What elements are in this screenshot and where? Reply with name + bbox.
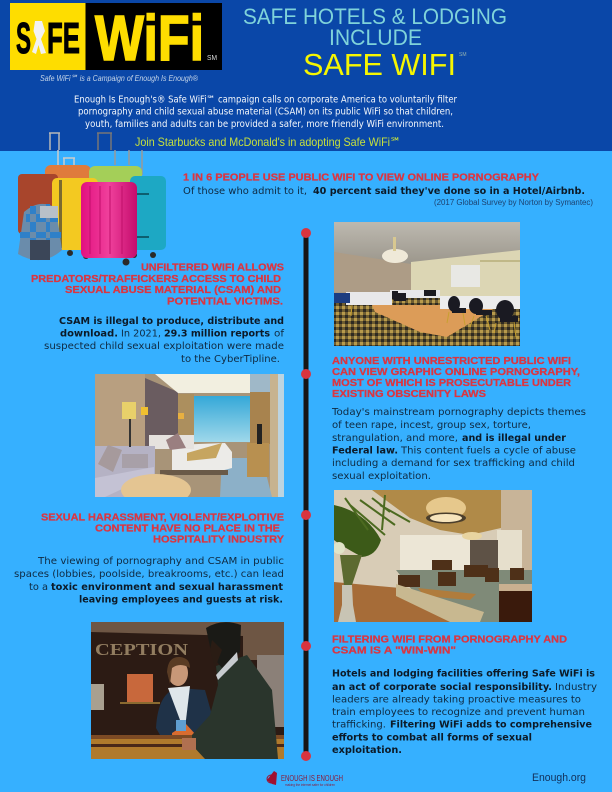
- heading: win-win: [332, 635, 568, 656]
- text: mainstream pornography: Today's mainstream pornography depicts themes: [331, 407, 586, 418]
- text: corporate social responsibility: train employees to recognize and prevent human: [332, 707, 585, 718]
- text: corporate social responsibility: Filtering WiFi adds to comprehensive: [390, 720, 592, 731]
- heading: unrestricted public wifi: [332, 356, 580, 400]
- heading: unfiltered wifi: POTENTIAL VICTIMS.: [167, 297, 283, 308]
- survey statement: 40 percent said they've done so in a Hotel/Airbnb.: [313, 186, 585, 197]
- logo: Safe WiFi: S: [16, 14, 31, 63]
- heading: sexual harassment: [41, 513, 284, 546]
- title: SAFE HOTELS & LODGING: [243, 4, 507, 29]
- heading: unrestricted public wifi: MOST OF WHICH IS PROSECUTABLE UNDER: [332, 378, 572, 389]
- survey heading: 1 IN 6 PEOPLE USE PUBLIC WIFI TO VIEW ONLINE PORNOGRAPHY: [183, 173, 539, 184]
- intro paragraph: Enough Is Enough's® Safe WiFi℠ campaign calls on corporate America to voluntarily filter: [74, 94, 458, 106]
- survey statement: [183, 186, 585, 197]
- text: mainstream pornography: sexual exploitation.: [332, 471, 431, 482]
- timeline: [301, 228, 311, 761]
- text: viewing of pornography: [14, 556, 284, 606]
- text: corporate social responsibility: exploitation.: [332, 745, 402, 756]
- text: mainstream pornography: of teen rape, incest, group sex, torture,: [332, 420, 531, 431]
- text: corporate social responsibility: Industry: [555, 682, 597, 693]
- text: corporate social responsibility: Hotels and lodging facilities offering Safe WiFi is: [332, 669, 595, 680]
- text: mainstream pornography: strangulation, and more,: [332, 433, 458, 444]
- image: banquet room: [334, 222, 520, 346]
- luggage image: [18, 133, 166, 266]
- logo caption: Safe WiFi℠ is a Campaign of Enough Is Enough®: [40, 73, 199, 83]
- intro paragraph: youth, families and adults can be provided a safer, more friendly WiFi environment.: [85, 119, 444, 130]
- image: hotel bedroom: [95, 374, 284, 506]
- text: mainstream pornography: Federal law.: [332, 446, 398, 456]
- text: viewing of pornography: leaving employees and guests at risk.: [79, 595, 283, 606]
- title: [243, 4, 507, 82]
- text: mainstream pornography: and is illegal under: [462, 433, 566, 444]
- text: mainstream pornography: This content fuels a cycle of abuse: [400, 446, 576, 456]
- text: CSAM is illegal: CSAM is illegal to produce, distribute and: [59, 316, 284, 327]
- survey source: (2017 Global Survey by Norton by Symantec): [434, 198, 593, 207]
- heading: unfiltered wifi: PREDATORS/TRAFFICKERS ACCESS TO CHILD: [31, 274, 282, 285]
- heading: unfiltered wifi: [31, 263, 284, 308]
- intro paragraph: pornography and child sexual abuse material (CSAM) on its public WiFi so that children,: [78, 106, 453, 118]
- header band: [0, 0, 612, 151]
- survey statement: Of those who admit to it,: [183, 186, 307, 197]
- heading: unfiltered wifi: UNFILTERED WIFI ALLOWS: [141, 263, 284, 274]
- text: viewing of pornography: to a: [29, 582, 48, 593]
- text: corporate social responsibility: an act of corporate social responsibility.: [332, 682, 552, 693]
- text: CSAM is illegal: In 2021,: [121, 329, 161, 340]
- text: corporate social responsibility: efforts to combat all forms of sexual: [332, 733, 532, 744]
- text: CSAM is illegal: [44, 316, 285, 365]
- heading: win-win: CSAM IS A "WIN-WIN": [332, 646, 456, 656]
- heading: sexual harassment: SEXUAL HARASSMENT, VIOLENT/EXPLOITIVE: [41, 513, 284, 524]
- logo: Safe WiFi: WiFi: [95, 2, 204, 74]
- text: corporate social responsibility: leaders are already taking proactive measures to: [332, 695, 581, 706]
- text: CSAM is illegal: to the CyberTipline.: [181, 354, 280, 365]
- text: corporate social responsibility: trafficking.: [332, 720, 386, 731]
- text: viewing of pornography: spaces (lobbies, poolside, breakrooms, etc.) can lead: [14, 569, 284, 580]
- heading: sexual harassment: CONTENT HAVE NO PLACE IN THE: [95, 524, 280, 534]
- image: hotel lobby: [333, 490, 532, 622]
- image: hotel reception: [91, 622, 284, 759]
- heading: unrestricted public wifi: CAN VIEW GRAPHIC ONLINE PORNOGRAPHY,: [332, 367, 580, 378]
- text: mainstream pornography: [331, 407, 586, 482]
- text: mainstream pornography: including a demand for sex trafficking and child: [332, 458, 575, 469]
- intro paragraph: [74, 94, 458, 130]
- logo: Safe WiFi: SM: [207, 55, 217, 62]
- text: CSAM is illegal: suspected child sexual exploitation were made: [44, 341, 284, 352]
- heading: unfiltered wifi: SEXUAL ABUSE MATERIAL (CSAM) AND: [65, 285, 282, 296]
- call to action: Join Starbucks and McDonald's in adopting Safe WiFi℠: [135, 135, 401, 149]
- footer logo: Enough Is Enough: [267, 771, 343, 787]
- heading: unrestricted public wifi: EXISTING OBSCENITY LAWS: [332, 389, 486, 400]
- title: SAFE WIFI: [303, 47, 456, 82]
- text: corporate social responsibility: [332, 669, 597, 756]
- footer logo: Enough Is Enough: ENOUGH IS ENOUGH: [281, 774, 343, 783]
- text: CSAM is illegal: download.: [60, 329, 118, 340]
- heading: unrestricted public wifi: ANYONE WITH UNRESTRICTED PUBLIC WIFI: [332, 356, 571, 367]
- logo: Safe WiFi: [10, 2, 222, 74]
- image: hotel reception: CEPTION: [95, 640, 189, 659]
- heading: win-win: FILTERING WIFI FROM PORNOGRAPHY AND: [332, 635, 568, 646]
- logo: Safe WiFi: FE: [47, 14, 80, 63]
- text: CSAM is illegal: 29.3 million reports: [164, 329, 270, 340]
- text: viewing of pornography: toxic environment and sexual harassment: [51, 582, 283, 593]
- heading: sexual harassment: HOSPITALITY INDUSTRY: [153, 535, 284, 546]
- title: SM: [459, 52, 466, 58]
- text: viewing of pornography: The viewing of pornography and CSAM in public: [37, 556, 284, 567]
- footer logo: Enough Is Enough: making the internet safer for children: [285, 783, 335, 787]
- text: CSAM is illegal: of: [274, 329, 285, 340]
- title: INCLUDE: [329, 25, 422, 50]
- footer link: Enough.org: [532, 772, 586, 784]
